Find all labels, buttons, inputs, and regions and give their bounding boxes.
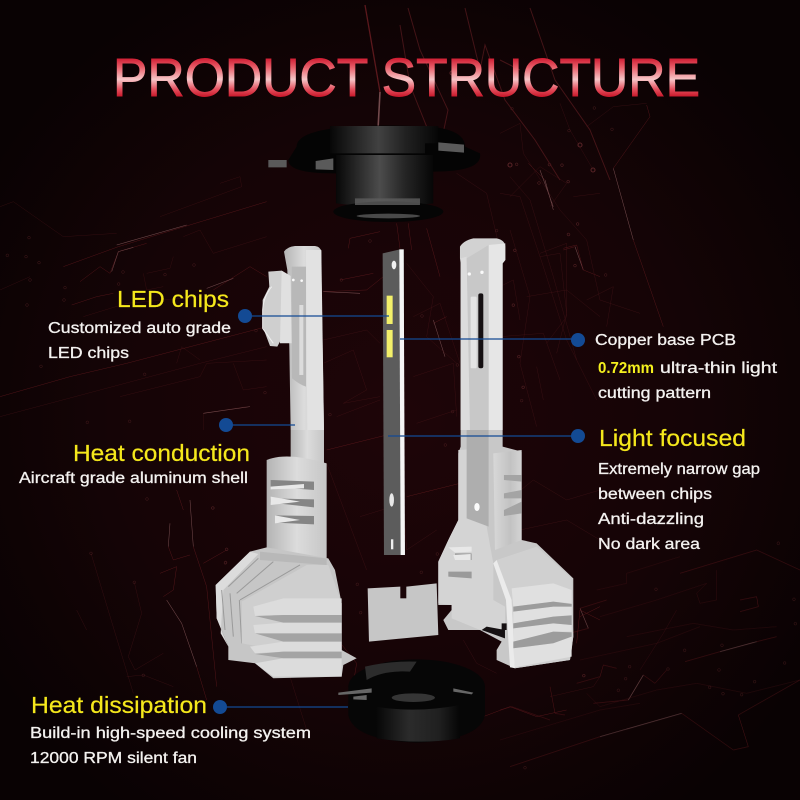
description: No dark area: [598, 536, 700, 553]
upper flange: [288, 126, 480, 173]
description: Customized auto grade: [48, 320, 231, 337]
heading: LED chips: [117, 286, 229, 312]
lip: [333, 201, 443, 222]
heat sink plate: [368, 583, 438, 642]
leader line and dot: [213, 700, 348, 714]
LED chips: [387, 296, 393, 357]
lower body with fins: [216, 430, 357, 678]
callout: Light focused: [388, 425, 760, 553]
title: PRODUCT STRUCTURE: [113, 48, 700, 108]
description: [598, 461, 760, 553]
description: cutting pattern: [598, 385, 711, 402]
description: between chips: [598, 486, 712, 503]
description: Anti-dazzling: [598, 511, 704, 528]
description: Aircraft grade aluminum shell: [19, 470, 248, 487]
description: Build-in high-speed cooling system: [30, 725, 311, 742]
stem and clip: [263, 246, 324, 430]
description: LED chips: [48, 345, 129, 362]
heading: Heat conduction: [73, 440, 250, 466]
description: [30, 725, 311, 767]
heading: Heat dissipation: [31, 692, 207, 718]
callout: Heat conduction: [19, 418, 295, 487]
description: ultra-thin light: [660, 360, 778, 377]
callout: Copper base PCB: [400, 332, 778, 402]
stem: [460, 238, 505, 430]
description: [48, 320, 231, 362]
top black adapter cap: [268, 126, 480, 222]
leader line and dot: [219, 418, 295, 432]
leader line and dot: [388, 429, 585, 443]
heading: Light focused: [599, 425, 746, 451]
callout: LED chips: [48, 286, 389, 362]
tabs: [268, 142, 464, 170]
left aluminum shell: [216, 246, 357, 678]
cylinder body: [336, 155, 433, 207]
leader line and dot: [238, 309, 389, 323]
description: Extremely narrow gap: [598, 461, 760, 478]
description: 12000 RPM silent fan: [30, 750, 197, 767]
description: 0.72mm: [598, 360, 654, 377]
bottom black fan ring: [338, 659, 485, 743]
leader line and dot: [400, 333, 585, 347]
heading: Copper base PCB: [595, 332, 736, 349]
lower body cross-section: [438, 430, 573, 668]
PCB strip with LED chips: [383, 249, 405, 555]
description: [598, 360, 778, 402]
right aluminum shell: [438, 238, 573, 668]
callout: Heat dissipation: [30, 692, 348, 767]
